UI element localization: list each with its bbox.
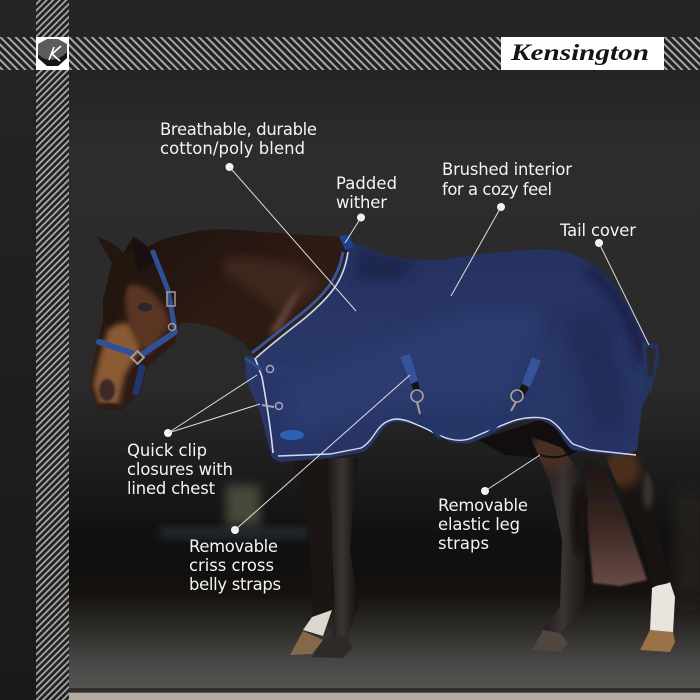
white sock: [650, 582, 675, 633]
callout: interior: for a cozy feel: [442, 180, 552, 199]
front hoof light: [290, 631, 323, 655]
shoulder shadow: [355, 250, 420, 280]
tail cover: [641, 342, 659, 398]
callout: closures: lined chest: [127, 479, 216, 498]
neck and head: [90, 229, 348, 410]
callout: leg straps: Removable: [438, 496, 528, 515]
leg strap: [540, 454, 568, 457]
wither pad: [339, 235, 354, 250]
ear near: [134, 244, 154, 270]
diagonal band: left: [36, 0, 69, 700]
callout: fabric: cotton/poly blend: [160, 139, 305, 158]
callout: tail cover: [559, 221, 649, 345]
ear far: [112, 252, 122, 262]
neck piping: [256, 252, 348, 358]
logo mark: [36, 37, 69, 70]
callout: tail cover: Tail cover: [559, 221, 636, 240]
front hoof dark: [312, 636, 352, 658]
tail cover opening: [646, 346, 656, 378]
callout: closures: Quick clip: [127, 441, 207, 460]
callout: closures: closures with: [127, 460, 233, 479]
chest piping: [255, 358, 273, 453]
flank light: [302, 320, 522, 414]
belly strap right: [487, 357, 541, 435]
callout: closures: [127, 375, 260, 498]
callout: interior: [442, 160, 572, 296]
muzzle: [99, 379, 115, 401]
callout: fabric: Breathable, durable: [160, 120, 317, 139]
front leg near: [293, 460, 332, 632]
chin: [98, 402, 120, 408]
brand logo: [501, 37, 664, 70]
face middle: [125, 284, 170, 355]
crown strap: [153, 252, 175, 330]
callout: belly straps: [189, 375, 410, 594]
callout: wither: [336, 174, 397, 243]
rump shadow: [585, 262, 648, 370]
white-sock hoof: [640, 630, 675, 652]
callout: wither: Padded: [336, 174, 397, 193]
rear leg near: [530, 436, 588, 632]
neck sheen: [268, 286, 302, 336]
chest clip bottom: [262, 401, 298, 411]
brand logo: Kensington: [510, 40, 649, 65]
diagonal band: top: [0, 37, 700, 70]
callout: belly straps: criss cross: [189, 556, 274, 575]
horse: [85, 225, 675, 658]
face highlight: [93, 323, 141, 405]
callout: fabric: [160, 120, 356, 311]
belly: [478, 420, 590, 460]
throat strap: [136, 368, 142, 392]
blanket: [240, 235, 665, 465]
cheek strap: [143, 332, 175, 354]
blanket body: [240, 235, 665, 465]
rear leg far: [604, 450, 655, 512]
chest clip top: [245, 358, 291, 374]
callout: belly straps: belly straps: [189, 575, 281, 594]
buckle: [167, 292, 175, 306]
logo patch: [280, 430, 304, 440]
tail: [585, 457, 647, 586]
callout: interior: Brushed interior: [442, 160, 572, 179]
callout: leg straps: elastic leg: [438, 515, 520, 534]
bottom piping: [278, 417, 636, 456]
nose band: [99, 342, 132, 353]
callout: belly straps: Removable: [189, 537, 278, 556]
callout: wither: wither: [336, 193, 387, 212]
callout: leg straps: [438, 455, 540, 553]
callout: leg straps: straps: [438, 534, 489, 553]
forelock: [104, 282, 132, 324]
cheek ring: [168, 324, 176, 330]
nose ring: [131, 351, 144, 364]
neck binding: [252, 252, 343, 353]
front leg rear: [323, 458, 358, 637]
belly strap left: [400, 354, 440, 438]
rear hoof: [532, 630, 568, 652]
fold shadow: [564, 315, 628, 430]
eye: [138, 302, 152, 312]
halter: [99, 252, 176, 392]
shoulder highlight: [225, 257, 325, 318]
front white sock: [303, 610, 332, 636]
